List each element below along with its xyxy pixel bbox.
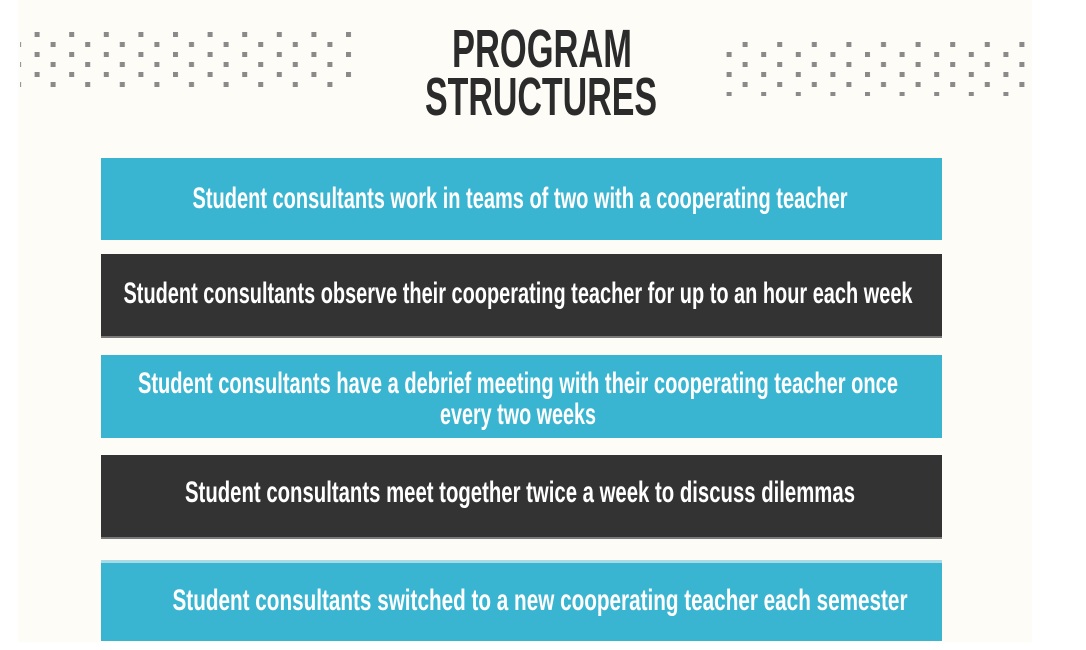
box 1 [101, 158, 942, 240]
dot pattern left [20, 32, 352, 90]
title: PROGRAM [452, 19, 632, 79]
title [425, 19, 657, 127]
title: STRUCTURES [425, 67, 657, 127]
box 5 [101, 560, 942, 641]
box 3: every two weeks [440, 398, 596, 431]
box 3 [101, 355, 942, 438]
box 2 [101, 254, 942, 338]
dot pattern right [718, 38, 1032, 96]
box 4 [101, 455, 942, 539]
